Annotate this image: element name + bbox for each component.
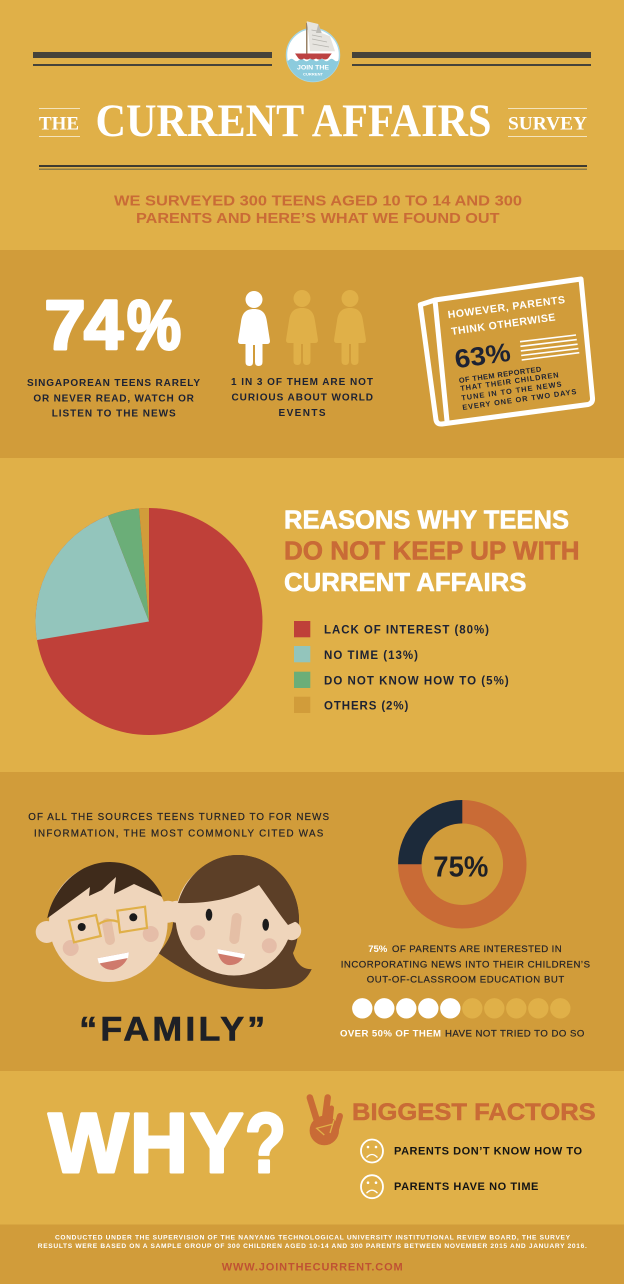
text: website: WWW.JOINTHECURRENT.COM [222, 1262, 403, 1274]
text: parents interested: OF PARENTS ARE INTERESTED IN [392, 944, 562, 955]
heading: why: ? [245, 1096, 286, 1190]
stat: 74%: 4 [84, 286, 123, 364]
heading: reasons: CURRENT AFFAIRS [284, 567, 526, 597]
illustration: boy face [36, 862, 179, 982]
stat: 74%: % [127, 286, 181, 364]
panel: header [33, 21, 591, 223]
text: parents interested: INCORPORATING NEWS INTO THEIR CHILDREN’S [341, 959, 590, 970]
text: not tried: HAVE NOT TRIED TO DO SO [445, 1029, 584, 1040]
text: reported: OF THEM REPORTED [458, 364, 542, 385]
text: reported [458, 364, 577, 412]
icon: join the current boat logo [286, 21, 340, 82]
stat: 63%: 63% [453, 337, 512, 374]
text: reported: TUNE IN TO THE NEWS [461, 380, 562, 402]
title: survey: SURVEY [508, 113, 587, 134]
panel: reasons [0, 458, 624, 772]
text: sources intro [28, 812, 329, 840]
panel: news sources [0, 772, 624, 1071]
panel: why [0, 1071, 624, 1224]
text: methodology: RESULTS WERE BASED ON A SAMPLE GROUP OF 300 CHILDREN AGED 10-14 AND 300 PARENTS BETWEEN NOVEMBER 2015 AND JANUARY 2016. [38, 1243, 587, 1250]
text: teens rarely read: SINGAPOREAN TEENS RARELY [27, 378, 200, 389]
pie chart [35, 508, 262, 735]
heading: reasons: REASONS WHY TEENS [284, 504, 569, 534]
factor: no time: PARENTS HAVE NO TIME [394, 1181, 538, 1193]
factor: don't know how [361, 1140, 582, 1162]
text: 1 in 3: EVENTS [278, 408, 326, 419]
dot scale: five of ten [352, 998, 570, 1018]
subheading: WE SURVEYED 300 TEENS AGED 10 TO 14 AND 300 [114, 192, 522, 209]
heading: why: Y [190, 1096, 244, 1190]
icon: join the current boat logo: CURRENT [303, 71, 324, 76]
icon: join the current boat logo: JOIN THE [297, 65, 329, 72]
legend item: do not know how to [294, 672, 509, 688]
heading: family: “FAMILY” [79, 1011, 268, 1049]
illustration: girl face [158, 855, 312, 989]
icon: person white [238, 291, 270, 366]
icon: sad face [361, 1175, 383, 1198]
text: 1 in 3: 1 IN 3 OF THEM ARE NOT [231, 377, 373, 388]
legend [294, 621, 509, 713]
text: 1 in 3: CURIOUS ABOUT WORLD [232, 393, 373, 404]
text: sources intro: INFORMATION, THE MOST COMMONLY CITED WAS [34, 829, 324, 840]
icon: two fingers hand [310, 1098, 340, 1145]
icon: people one in three [238, 290, 366, 366]
title [39, 95, 587, 147]
legend item: lack of interest: LACK OF INTEREST (80%) [324, 624, 489, 636]
heading: biggest factors: BIGGEST FACTORS [352, 1099, 596, 1126]
donut chart [398, 800, 515, 917]
text: sources intro: OF ALL THE SOURCES TEENS TURNED TO FOR NEWS [28, 812, 329, 823]
icon: person faded [334, 290, 366, 365]
legend item: no time: NO TIME (13%) [324, 650, 418, 662]
text: however parents: HOWEVER, PARENTS [447, 294, 566, 321]
legend item: do not know how to: DO NOT KNOW HOW TO (5%) [324, 676, 509, 688]
text: reported: THAT THEIR CHILDREN [460, 370, 559, 393]
legend item: others: OTHERS (2%) [324, 700, 408, 712]
icon: text lines [520, 335, 579, 360]
text: parents interested: OUT-OF-CLASSROOM EDUCATION BUT [367, 975, 564, 986]
heading: why: W [48, 1096, 129, 1190]
text: not tried: OVER 50% OF THEM [340, 1029, 441, 1040]
legend item: no time [294, 646, 418, 662]
text: methodology [38, 1235, 587, 1250]
panel: key stats [0, 250, 624, 458]
heading: why [48, 1096, 286, 1190]
top rules left [33, 52, 272, 66]
panel: footer [0, 1224, 624, 1284]
icon: newspaper [420, 279, 593, 424]
subheading [114, 192, 522, 227]
stat: 74% [44, 286, 181, 364]
newspaper callout [420, 279, 593, 424]
text: methodology: CONDUCTED UNDER THE SUPERVISION OF THE NANYANG TECHNOLOGICAL UNIVERSITY INSTITUTIONAL REVIEW BOARD, THE SURVEY [55, 1235, 571, 1242]
text: teens rarely read [27, 378, 200, 420]
factor: don't know how: PARENTS DON’T KNOW HOW TO [394, 1146, 582, 1158]
text: however parents: THINK OTHERWISE [450, 311, 556, 338]
text: 1 in 3 [231, 377, 373, 419]
top rules right [352, 52, 591, 66]
stat: 75%: 75% [433, 852, 488, 884]
text: teens rarely read: OR NEVER READ, WATCH OR [33, 394, 195, 405]
heading: why: H [130, 1096, 188, 1190]
legend item: others [294, 697, 408, 713]
text: parents interested [341, 944, 590, 986]
stat: 74%: 7 [44, 286, 86, 364]
heading: reasons: DO NOT KEEP UP WITH [284, 535, 580, 565]
icon: person faded [286, 290, 318, 365]
text: however parents [447, 294, 566, 338]
subheading: PARENTS AND HERE’S WHAT WE FOUND OUT [136, 210, 500, 227]
factor: no time [361, 1175, 538, 1198]
text: reported: EVERY ONE OR TWO DAYS [462, 387, 577, 412]
heading: reasons [284, 504, 580, 597]
text: teens rarely read: LISTEN TO THE NEWS [52, 409, 176, 420]
text: parents interested: 75% [368, 944, 388, 955]
legend item: lack of interest [294, 621, 489, 637]
title: current affairs: CURRENT AFFAIRS [96, 95, 492, 147]
text: not tried [340, 1029, 584, 1040]
title: the: THE [39, 113, 79, 134]
icon: sad face [361, 1140, 383, 1162]
